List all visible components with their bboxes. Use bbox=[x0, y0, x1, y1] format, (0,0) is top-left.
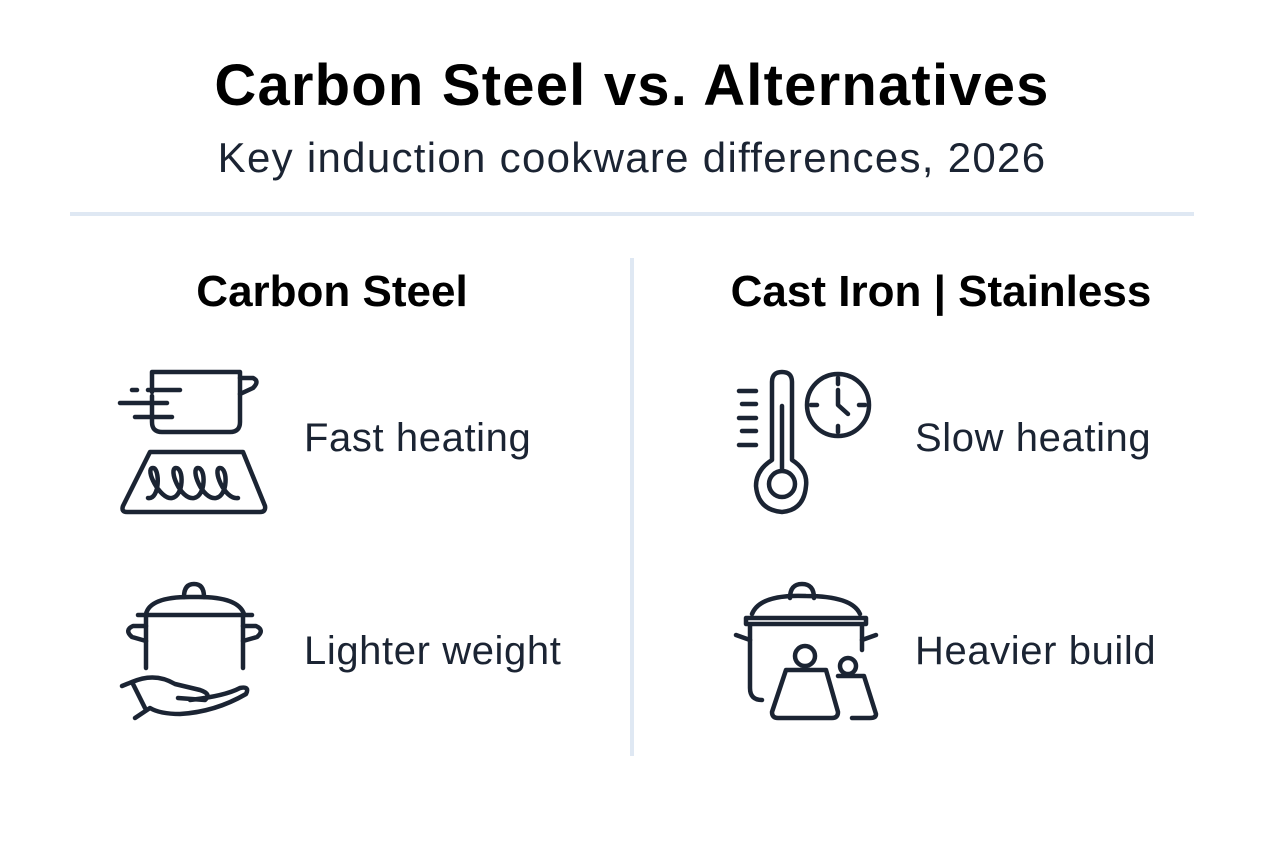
icon: pot on hand bbox=[120, 582, 263, 720]
subtitle: Key induction cookware differences, 2026 bbox=[218, 134, 1046, 181]
icon: pot on induction burner bbox=[118, 370, 268, 514]
heading: carbon steel: Carbon Steel bbox=[196, 267, 468, 316]
heading: cast iron | stainless: Cast Iron | Stainless bbox=[731, 267, 1151, 316]
label: slow heating: Slow heating bbox=[915, 416, 1151, 460]
label: lighter weight: Lighter weight bbox=[304, 629, 561, 673]
icon: thermometer and clock bbox=[736, 370, 872, 514]
label: heavier build: Heavier build bbox=[915, 629, 1156, 673]
title: Carbon Steel vs. Alternatives bbox=[214, 53, 1050, 118]
label: fast heating: Fast heating bbox=[304, 416, 531, 460]
icon: heavy pot with weights bbox=[734, 582, 878, 720]
